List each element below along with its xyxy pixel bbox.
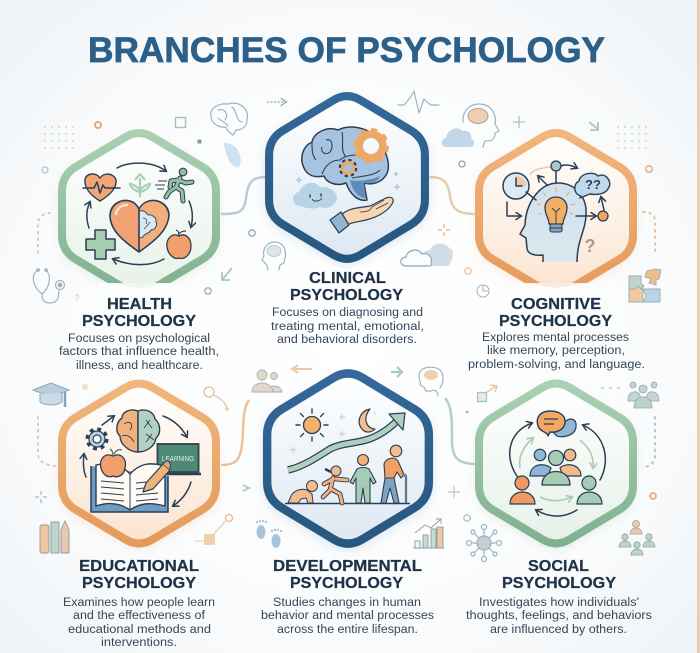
- icon: ground line: [285, 502, 410, 504]
- icon: health cycle: [83, 163, 192, 265]
- icon: lifespan scene: [285, 409, 410, 504]
- icon: back people: [530, 449, 581, 476]
- text: developmental description: across the entire lifespan.: [277, 624, 418, 636]
- hexagon: health: [62, 133, 216, 300]
- hexagon: developmental: [266, 373, 430, 547]
- icon: thought bubble: ??: [585, 177, 601, 192]
- icon: chalkboard: LEARNING: [162, 456, 194, 463]
- heading: educational: EDUCATIONAL: [79, 558, 199, 575]
- heading: cognitive: PSYCHOLOGY: [499, 313, 612, 330]
- icon: pencil: [143, 461, 171, 492]
- text: clinical description: Focuses on diagnosing and: [272, 307, 423, 319]
- connector: clinical to cognitive: [429, 177, 476, 214]
- text: health description: Focuses on psychological: [68, 333, 210, 345]
- icon: running child: [323, 466, 347, 503]
- icon: small decor left: ?: [74, 293, 80, 303]
- hexagon: educational: [62, 384, 216, 547]
- arrows around: [102, 416, 114, 425]
- icon: centre person: [542, 450, 570, 485]
- icon: stethoscope: [33, 269, 64, 303]
- icon: head with brain: [262, 242, 286, 270]
- icon: adult: [350, 454, 376, 503]
- icon: large gear: [356, 131, 386, 161]
- icon: books and pencil: [40, 521, 69, 553]
- icon: speech bubbles: [537, 411, 576, 437]
- panel: clinical psychology: [268, 96, 426, 346]
- heading: educational: PSYCHOLOGY: [82, 575, 196, 592]
- icon: sun: [296, 409, 328, 441]
- text: cognitive description: like memory, perception,: [487, 345, 625, 357]
- text: developmental description: behavior and mental processes: [261, 610, 434, 622]
- icon: two people: [252, 370, 282, 392]
- icon: dot grid left: [44, 126, 74, 149]
- text: clinical description: and behavioral disorders.: [277, 334, 417, 346]
- heading: cognitive: COGNITIVE: [511, 296, 601, 313]
- icon: clock: [503, 173, 529, 199]
- heading: developmental: DEVELOPMENTAL: [273, 558, 422, 575]
- heading: health: HEALTH: [107, 296, 172, 313]
- text: cognitive description: problem-solving, and language.: [468, 359, 645, 371]
- heading: clinical: [290, 270, 403, 304]
- icon: bar chart: [413, 519, 444, 548]
- icon: nodes and arrows: [507, 161, 608, 221]
- icon: sparkles: [296, 172, 400, 190]
- icon: square with arrow: [478, 385, 497, 402]
- icon: head with idea: [503, 161, 610, 262]
- icon: clouds lower middle: [401, 243, 453, 266]
- heading: cognitive: [499, 296, 612, 330]
- icon: pulse line: [398, 91, 439, 113]
- icon: footprints: [256, 520, 282, 548]
- icon: smiling cloud: [293, 183, 337, 209]
- text: clinical description: [271, 307, 424, 346]
- icon: brain outline: [211, 103, 248, 135]
- icon: orange arrow: [292, 365, 312, 373]
- icon: small decor lower left: [35, 384, 249, 545]
- icon: blue cloud: [442, 128, 474, 147]
- heading: social: PSYCHOLOGY: [502, 575, 616, 592]
- icon: apple: [167, 230, 191, 258]
- icon: brain with gears: [302, 127, 388, 200]
- text: clinical description: treating mental, emotional,: [271, 321, 424, 333]
- hexagon: cognitive: [479, 133, 633, 300]
- text: educational description: interventions.: [101, 637, 177, 649]
- text: educational description: educational methods and: [68, 624, 211, 636]
- decorative background icons: [33, 91, 661, 562]
- icon: brain two colours: [117, 410, 160, 452]
- icon: growth arrow: [288, 413, 405, 470]
- text: health description: factors that influence health,: [59, 346, 219, 358]
- icon: three people: [628, 382, 659, 408]
- heading: educational: [79, 558, 199, 592]
- icon: apple: [101, 449, 125, 477]
- icon: mortarboard: [33, 383, 69, 407]
- icon: hand: [330, 197, 393, 233]
- icon: runner: [155, 168, 192, 201]
- text: social description: [466, 597, 652, 636]
- icon: brain folds: [312, 132, 380, 178]
- icon: orange person: [510, 476, 535, 504]
- icon: moon: [359, 409, 375, 432]
- text: cognitive description: Explores mental processes: [482, 332, 629, 344]
- text: developmental description: Studies changes in human: [273, 597, 421, 609]
- heading: social: SOCIAL: [528, 558, 589, 575]
- icon: dashed arrow: [267, 101, 286, 103]
- text: health description: illness, and healthcare.: [76, 360, 203, 372]
- icon: sprout: [130, 174, 150, 197]
- text: social description: thoughts, feelings, and behaviors: [466, 610, 652, 622]
- heading: health: [82, 296, 196, 330]
- icon: green person: [577, 476, 602, 504]
- heading: social: [502, 558, 616, 592]
- icon: stem shading: [350, 176, 380, 198]
- panel: health psychology: [59, 133, 219, 372]
- icon: social cycle: [510, 411, 605, 516]
- connector: educational to developmental: [221, 400, 249, 465]
- heading: clinical: PSYCHOLOGY: [290, 287, 403, 304]
- icon: sparkles: [290, 412, 375, 453]
- right edge strip: [697, 0, 700, 653]
- text: social description: Investigates how individuals': [479, 597, 639, 609]
- icon: elder with cane: [381, 445, 406, 503]
- panel: educational psychology: [62, 384, 216, 649]
- icon: head with brain top right: [463, 104, 499, 147]
- icon: crawling baby: [288, 480, 318, 503]
- icon: small gear: [340, 160, 356, 176]
- panel: developmental psychology: [261, 373, 434, 636]
- icon: dot grid right: [617, 126, 647, 149]
- icon: learning scene: [83, 410, 201, 512]
- icon: open book: [91, 464, 168, 512]
- icon: gear: [88, 430, 106, 448]
- text: educational description: Examines how people learn: [63, 597, 215, 609]
- connector: health to clinical: [221, 177, 266, 214]
- heading: health: PSYCHOLOGY: [82, 313, 196, 330]
- hexagon: clinical: [268, 96, 426, 262]
- icon: green arrow: [391, 367, 402, 377]
- icon: plus and rings right: [438, 116, 655, 297]
- text: educational description: [63, 597, 215, 649]
- text: health description: [59, 333, 219, 372]
- icon: puzzle: [629, 269, 661, 302]
- icon: small decor left: [38, 118, 255, 303]
- icon: question mark: ?: [584, 236, 596, 256]
- panel: cognitive psychology: [468, 133, 645, 371]
- panel: social psychology: [466, 384, 652, 636]
- icon: brain: [302, 127, 388, 200]
- icon: head silhouette: [520, 183, 586, 262]
- icon: big heart with brain: [110, 201, 169, 252]
- text: developmental description: [261, 597, 434, 636]
- title: BRANCHES OF PSYCHOLOGY: [88, 31, 605, 70]
- icon: medical cross: [86, 230, 115, 259]
- icon: group circle: [619, 520, 655, 555]
- icon: network: [466, 524, 502, 562]
- icon: head with brain lower: [419, 367, 443, 396]
- hexagon: social: [479, 384, 633, 547]
- heading: developmental: [273, 558, 422, 592]
- heading: developmental: PSYCHOLOGY: [290, 575, 403, 592]
- icon: small decor lower right: [448, 388, 656, 521]
- text: educational description: and the effectiveness of: [73, 610, 206, 622]
- heading: clinical: CLINICAL: [309, 270, 386, 287]
- text: social description: are influenced by others.: [490, 624, 627, 636]
- icon: light bulb: [537, 187, 575, 232]
- icon: small ecg heart: [83, 174, 120, 201]
- connector: developmental to social: [445, 398, 476, 464]
- text: cognitive description: [468, 332, 645, 371]
